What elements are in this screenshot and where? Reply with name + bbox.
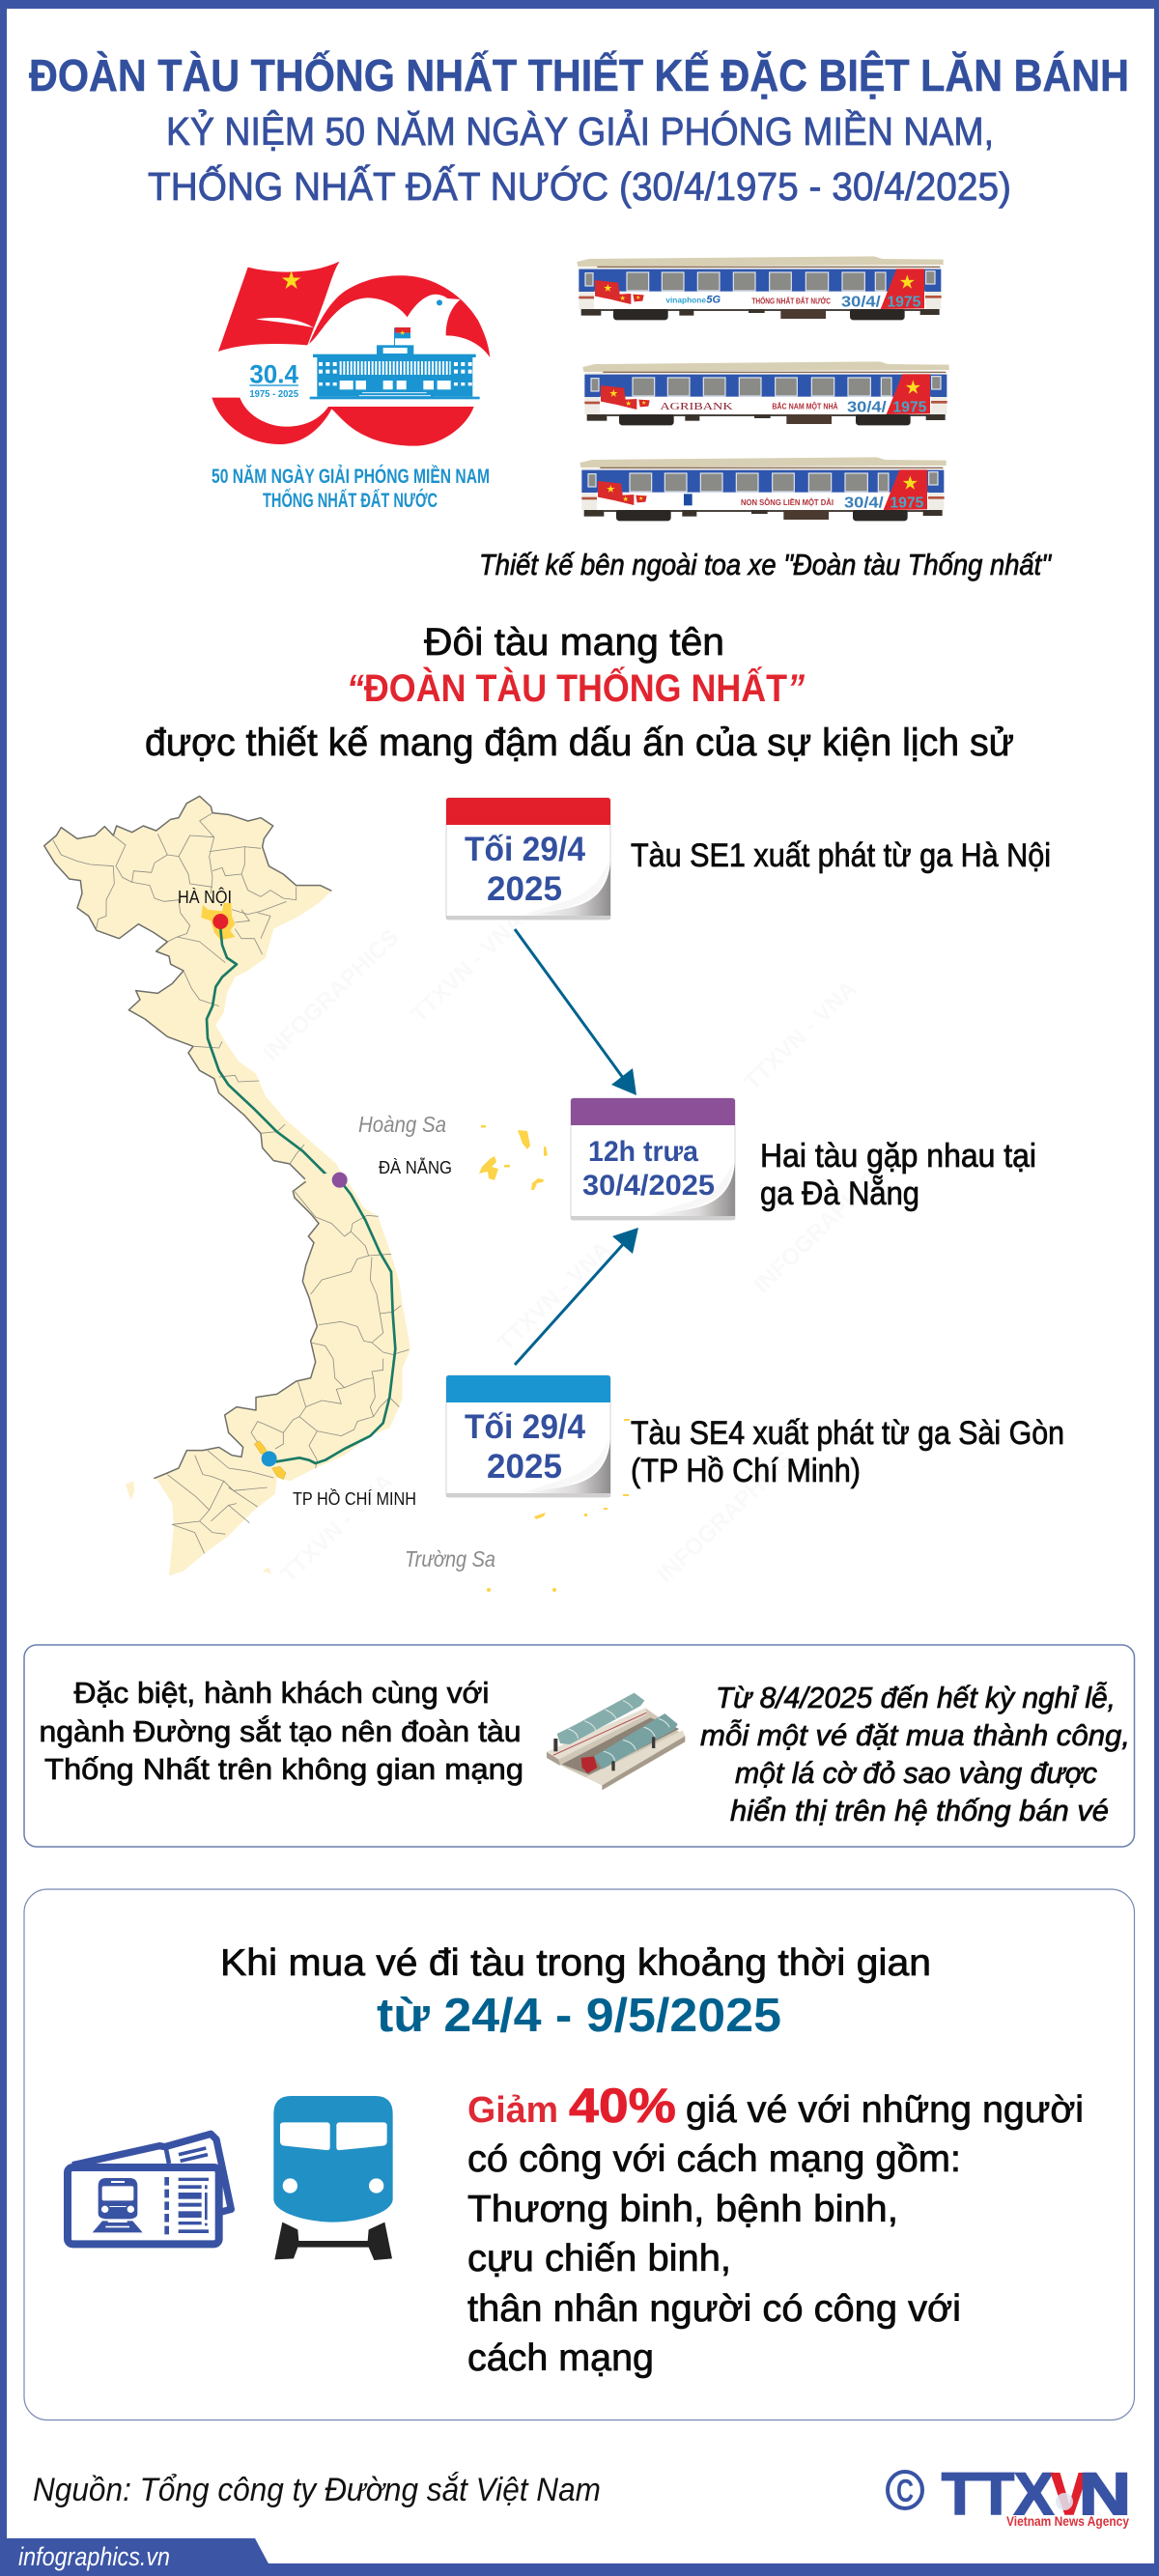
section heading: được thiết kế mang đậm dấu ấn của sự kiện lịch sử [145,722,1014,764]
train car 2: 30/4/ [847,399,888,415]
train car 2: BẮC NAM MỘT NHÀ [772,400,838,410]
calendar: SE4 evening 29/4 [446,1375,610,1497]
text: 40% discount: cách mạng [467,2337,654,2379]
islands: Trường Sa [487,1419,630,1592]
text: 40% discount: 40% [569,2079,676,2133]
footer tab: infographics.vn [18,2542,170,2571]
watermarks: INFOGRAPHICS [652,1446,799,1588]
icon: ticket [68,2134,231,2244]
logo: TTXVN [888,2461,1131,2529]
map labels: Trường Sa [405,1546,495,1571]
calendar: SE1 evening 29/4 [446,798,610,920]
section heading: Đôi tàu mang tên [424,621,724,664]
text: 40% discount: cựu chiến binh, [467,2238,731,2279]
text: trains meet: Hai tàu gặp nhau tại [760,1138,1036,1175]
watermarks: INFOGRAPHICS [258,924,405,1066]
train car 1: 5G [706,294,721,305]
calendar: SE4 evening 29/4: Tối 29/4 [465,1408,586,1446]
text: 40% discount: Thương binh, bệnh binh, [467,2189,898,2230]
text: 40% discount: thân nhân người có công với [467,2288,961,2330]
arrow: Sài Gòn to Đà Nẵng [515,1228,638,1365]
logo caption: THỐNG NHẤT ĐẤT NƯỚC [263,489,438,512]
train car 3: 1975 [890,495,924,511]
text: trains meet: ga Đà Nẵng [760,1175,919,1212]
map labels [178,887,495,1571]
title: THỐNG NHẤT ĐẤT NƯỚC (30/4/1975 - 30/4/2025) [148,164,1011,209]
train car 2: 1975 [892,399,927,415]
text: trains meet [760,1138,1036,1212]
text: 40% discount: có công với cách mạng gồm: [467,2138,961,2180]
text: passengers with railway: Đặc biệt, hành khách cùng với [73,1676,490,1710]
train car 1: 1975 [887,294,921,310]
map of Vietnam [44,796,630,1592]
text: SE4 departure [631,1415,1064,1489]
logo: TTXVN: V [1051,2461,1088,2527]
watermarks: TTXVN - VNA [739,976,862,1095]
heading: when buying: Khi mua vé đi tàu trong khoảng thời gian [220,1942,931,1984]
icon: train front [273,2096,393,2260]
text: passengers with railway: Thống Nhất trên không gian mạng [44,1752,523,1786]
train car 2: AGRIBANK [660,402,734,412]
logo: TTXVN: TTX [942,2461,1054,2527]
train car 1: vinaphone [665,295,706,304]
watermarks: TTXVN - VNA [493,1236,616,1356]
watermarks: INFOGRAPHICS [749,1156,895,1298]
watermarks: TTXVN - VNA [275,1468,399,1588]
map: south part [126,1172,410,1576]
logo caption [212,465,490,512]
icon: railway station [547,1693,685,1790]
train car 3: NON SÔNG LIỀN MỘT DẢI [741,496,834,507]
map labels: TP HỒ CHÍ MINH [293,1488,416,1509]
train car 3: 30/4/ [844,495,885,511]
logo: TTXVN: Vietnam News Agency [1006,2513,1129,2529]
train car 1 [577,256,944,320]
map: north part [44,796,354,1196]
map labels: ĐÀ NẴNG [379,1157,452,1177]
logo: 50 years [212,262,490,446]
footer tab [7,2538,269,2571]
calendar: noon 30/4: 12h trưa [588,1136,698,1168]
train car 1: 30/4/ [841,294,882,310]
text: SE1 departure: Tàu SE1 xuất phát từ ga Hà Nội [631,837,1051,874]
calendar: noon 30/4 [571,1098,735,1220]
logo: 50 years: 30.4 [249,360,298,389]
text: ticket flag display: Từ 8/4/2025 đến hết kỳ nghỉ lễ, [716,1681,1116,1714]
text: passengers with railway: ngành Đường sắt tạo nên đoàn tàu [39,1714,522,1748]
copyright mark: C [896,2473,914,2508]
text: ticket flag display: một lá cờ đỏ sao vàng được [735,1756,1097,1790]
text: SE4 departure: Tàu SE4 xuất phát từ ga Sài Gòn [631,1415,1064,1452]
calendar: SE4 evening 29/4: 2025 [487,1448,562,1486]
panel: online train [24,1645,1134,1847]
title: KỶ NIỆM 50 NĂM NGÀY GIẢI PHÓNG MIỀN NAM, [166,109,994,154]
arrow: Hà Nội to Đà Nẵng [515,929,636,1095]
section heading: “ĐOÀN TÀU THỐNG NHẤT” [347,665,805,710]
text: 40% discount: Giảm [467,2090,558,2131]
train car 2 [582,361,949,425]
caption: train exterior: Thiết kế bên ngoài toa xe "Đoàn tàu Thống nhất" [479,548,1053,581]
text: ticket flag display: hiển thị trên hệ thống bán vé [730,1794,1109,1827]
text: ticket flag display [700,1681,1130,1827]
text: 40% discount [467,2079,1084,2379]
logo: TTXVN: N [1079,2461,1131,2527]
text: SE4 departure: (TP Hồ Chí Minh) [631,1453,861,1489]
text: 40% discount: giá vé với những người [686,2089,1084,2131]
train car 1: THỐNG NHẤT ĐẤT NƯỚC [751,295,832,305]
copyright mark [888,2472,922,2508]
calendar: noon 30/4: 30/4/2025 [582,1170,715,1202]
date range: từ 24/4 - 9/5/2025 [377,1990,781,2042]
title [29,50,1129,209]
islands: Hoàng Sa [479,1125,548,1190]
text: ticket flag display: mỗi một vé đặt mua thành công, [700,1718,1130,1752]
calendar: SE1 evening 29/4: Tối 29/4 [465,831,586,868]
text: passengers with railway [39,1676,523,1786]
map labels: Hoàng Sa [358,1112,446,1137]
map labels: HÀ NỘI [178,887,232,907]
section heading [145,621,1014,764]
watermarks [258,908,895,1588]
source: Nguồn: Tổng công ty Đường sắt Việt Nam [33,2472,601,2508]
calendar: SE1 evening 29/4: 2025 [487,870,562,908]
logo caption: 50 NĂM NGÀY GIẢI PHÓNG MIỀN NAM [212,465,490,488]
panel: ticket discount [24,1889,1134,2420]
train car 3 [580,457,947,521]
logo: 50 years: 1975 - 2025 [249,389,298,400]
watermarks: TTXVN - VNA [406,908,529,1028]
